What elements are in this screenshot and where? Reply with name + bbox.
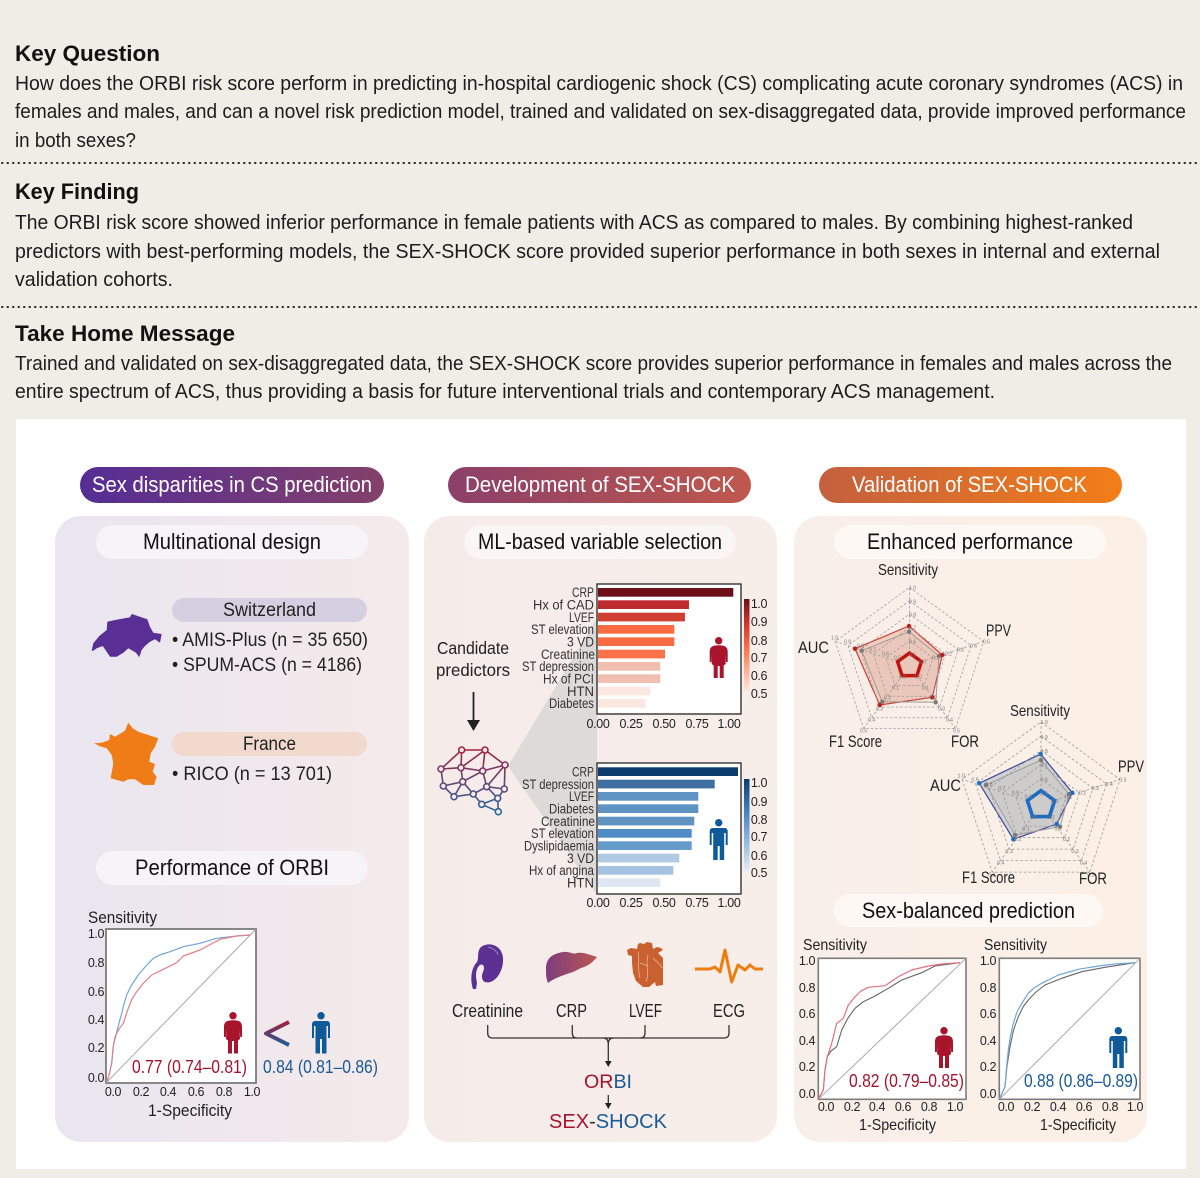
legend: male colour bar: 0.5 [751,866,768,880]
chart: male radar: 0.4 [1105,782,1113,788]
chart: male radar: 0.5 [1040,791,1048,797]
chart: female predictor ranking bars: CRP [572,585,594,600]
text block: key question: in both sexes? [15,129,136,152]
chart: male predictor ranking bars: Diabetes [549,802,594,816]
labels: male radar axes: FOR [1079,869,1107,888]
subheading pill: sex-balanced prediction [834,894,1103,927]
chart: female SEX-SHOCK ROC: 0.4 [799,1034,816,1048]
chart: male radar: 1.0 [1040,720,1048,726]
label: LVEF: LVEF [629,1001,662,1021]
chart: ORBI ROC curves [88,908,261,1120]
heading: key finding: Key Finding [15,179,139,204]
chart: male radar: 0.5 [988,872,996,878]
chart: male radar: 0.0 [1030,815,1037,821]
chart: female radar: 0.1 [922,686,929,692]
chart: ORBI ROC curves: 0.2 [88,1041,105,1055]
labels: male radar axes: F1 Score [962,868,1015,887]
text block: Swiss cohorts: • SPUM-ACS (n = 4186) [172,655,362,676]
label: CRP: CRP [556,1001,587,1021]
icon: male figure [1109,1027,1127,1068]
text block: French cohort: • RICO (n = 13 701) [172,764,332,785]
chart: female radar: 0.5 [894,656,901,662]
text block: key finding: validation cohorts. [15,268,173,291]
text block: take home message: entire spectrum of ACS, thus providing a basis for future interventional trials and contemporary ACS management. [15,380,995,403]
legend: female colour bar: 0.7 [751,651,768,665]
chart: female predictor ranking bars: 0.25 [620,717,643,731]
heading pill: sex disparities: Sex disparities in CS prediction [92,472,372,497]
chart: female SEX-SHOCK ROC: 0.4 [869,1100,886,1114]
chart: female radar: 0.5 [909,652,916,658]
chart: ORBI ROC curves: 0.0 [88,1071,105,1085]
chart: male SEX-SHOCK ROC: 0.0 [998,1100,1015,1114]
text block: Swiss cohorts: • AMIS-Plus (n = 35 650) [172,630,368,651]
heading: take home message: Take Home Message [15,321,235,346]
labels: female radar axes: AUC [798,638,829,657]
subheading pill: ML-based variable selection [464,525,736,559]
chart: male predictor ranking bars: Creatinine [541,814,595,829]
chart: male predictor ranking bars [522,763,741,910]
chart: female radar: 0.5 [983,640,990,646]
chart: male radar [958,720,1127,878]
labels: female radar axes: FOR [951,732,979,751]
legend: male colour bar: 0.7 [751,830,768,844]
chart: female radar: 0.7 [909,626,916,632]
legend: female colour bar: 0.5 [751,687,768,701]
chart: male predictor ranking bars: 0.50 [653,896,676,910]
chart: female predictor ranking bars: ST elevation [531,622,594,637]
label: candidate predictors: Candidate [437,638,509,658]
chart: female SEX-SHOCK ROC: 0.6 [799,1007,816,1021]
subheading pill: enhanced performance [834,525,1106,559]
legend: female colour bar: 0.8 [751,634,768,648]
labels: male radar axes [930,703,1144,888]
chart: male radar: 0.2 [1063,837,1070,843]
chart: female radar: 0.1 [932,656,939,662]
chart: male radar: 0.3 [1005,849,1013,855]
subheading pill: performance of ORBI: Performance of ORBI [135,855,329,880]
chart: female radar: 0.4 [946,718,953,724]
chart: male predictor ranking bars: Hx of angina [529,863,594,878]
label pill: Switzerland [172,598,367,622]
label: ORBI: ORBI [584,1071,632,1093]
chart: ORBI ROC curves: 0.2 [133,1085,150,1099]
chart: male SEX-SHOCK ROC: 0.4 [980,1034,997,1048]
chart: female SEX-SHOCK ROC: 0.6 [895,1100,912,1114]
chart: female radar: 0.8 [857,644,864,650]
text block: key finding: The ORBI risk score showed inferior performance in female patients with ACS as compared to males. By combining highest-ranked [15,211,1133,234]
labels: female radar axes: Sensitivity [878,562,938,579]
label: creatinine: Creatinine [452,1001,523,1021]
icon: male figure [710,819,728,860]
legend: male colour bar: 1.0 [751,776,768,790]
label pill: France: France [243,734,296,755]
chart: male radar: 1.0 [958,773,965,779]
chart: female predictor ranking bars: 1.00 [718,717,741,731]
icon: liver [546,952,597,983]
heading: key question: Key Question [15,41,160,66]
chart: female predictor ranking bars: Hx of PCI [543,672,594,686]
icon: female figure [935,1027,953,1068]
chart: male radar: 0.4 [1080,861,1087,867]
panel: development of SEX-SHOCK [424,467,777,1142]
chart: female predictor ranking bars: Hx of CAD [533,598,594,612]
chart: female radar: 0.7 [869,648,876,654]
chart: ORBI ROC curves: 0.4 [88,1013,105,1027]
labels: male radar axes: PPV [1118,757,1144,776]
bracket and arrow to ORBI [488,1025,729,1067]
chart: female predictor ranking bars: ST depression [522,659,594,674]
chart: male SEX-SHOCK ROC: 0.6 [1076,1100,1093,1114]
chart: ORBI ROC curves: 1.0 [88,927,105,941]
chart: male SEX-SHOCK ROC: 0.6 [980,1007,997,1021]
funnel connecting network to bar charts [508,618,597,895]
chart: male SEX-SHOCK ROC: 0.2 [1024,1100,1041,1114]
icon: ECG trace [695,950,763,982]
chart: female radar: 0.1 [892,686,899,692]
chart: ORBI ROC curves: 1.0 [244,1085,261,1099]
chart: ORBI ROC curves: 0.6 [88,985,105,999]
chart: male predictor ranking bars: CRP [572,764,594,780]
icon: heart [627,942,663,987]
chart: female radar: 0.0 [919,660,926,666]
chart: female radar [831,586,990,734]
legend: male colour bar [744,776,768,880]
chart: female predictor ranking bars: 0.00 [587,717,610,731]
chart: female SEX-SHOCK ROC: 1.0 [799,954,816,968]
text block: key question [15,72,1186,152]
icon: kidney [471,944,503,989]
chart: male predictor ranking bars: 1.00 [718,896,741,910]
value: male AUC: 0.84 (0.81–0.86) [263,1057,378,1077]
icon: neural network [438,747,508,815]
legend: female colour bar: 0.9 [751,615,768,629]
chart: male predictor ranking bars: ST depression [522,777,594,792]
chart: male radar: 0.3 [1092,786,1099,792]
icon: less-than sign [266,1022,289,1045]
chart: male radar: 0.3 [1071,849,1079,855]
labels: female radar axes [798,562,1011,751]
subheading pill: ML-based variable selection: ML-based variable selection [478,529,722,554]
chart: female radar: 0.0 [899,674,906,680]
text block: take home message [15,352,1172,403]
legend: male colour bar: 0.6 [751,849,768,863]
heading pill: validation: Validation of SEX-SHOCK [852,472,1087,497]
chart: male SEX-SHOCK ROC: 0.2 [980,1060,997,1074]
legend: male colour bar: 0.9 [751,795,768,809]
panel: validation of SEX-SHOCK [794,467,1147,1142]
chart: female predictor ranking bars: Diabetes [549,696,594,711]
chart: female predictor ranking bars: 3 VD [567,634,594,650]
label: ECG: ECG [713,1001,745,1021]
icon: France map [94,723,158,785]
chart: female SEX-SHOCK ROC: 1.0 [947,1100,964,1114]
chart: female radar: 0.3 [876,706,883,712]
labels: female radar axes: PPV [986,621,1011,640]
chart: male radar: 0.8 [1040,749,1048,755]
chart: ORBI ROC curves: 0.0 [105,1085,122,1099]
chart: male radar: 0.1 [1065,795,1072,801]
text block: Swiss cohorts [172,630,368,676]
chart: female SEX-SHOCK ROC: 0.82 (0.79–0.85) [849,1071,964,1091]
labels: male radar axes: Sensitivity [1010,703,1070,720]
chart: male predictor ranking bars: Dyslipidaemia [524,838,594,854]
chart: female radar: 0.6 [909,640,916,646]
chart: ORBI ROC curves: 0.77 (0.74–0.81) [132,1057,247,1077]
chart: female radar: 0.3 [957,648,964,654]
chart: male radar: 0.5 [1119,778,1127,784]
icon: Switzerland map [92,614,162,657]
chart: male SEX-SHOCK ROC: 0.0 [980,1087,997,1101]
chart: male predictor ranking bars: 0.75 [686,896,709,910]
chart: male predictor ranking bars: ST elevation [531,826,594,841]
chart: male radar: 0.7 [998,786,1005,792]
chart: female predictor ranking bars: 0.75 [686,717,709,731]
labels: female radar axes: F1 Score [829,732,882,751]
figure background panel [16,419,1186,1169]
chart: female SEX-SHOCK ROC: 0.2 [844,1100,861,1114]
chart: female radar: 0.2 [930,696,937,702]
chart: male SEX-SHOCK ROC: 0.4 [1050,1100,1067,1114]
chart: female SEX-SHOCK ROC: Sensitivity [803,937,867,954]
chart: male radar: 0.2 [1079,790,1086,796]
label: candidate predictors [436,638,510,680]
chart: female radar: 0.0 [915,674,922,680]
chart: female SEX-SHOCK ROC: 0.8 [799,981,816,995]
chart: male radar: 0.5 [1087,872,1095,878]
chart: female radar: 0.3 [938,706,945,712]
subheading pill: enhanced performance: Enhanced performance [867,529,1073,554]
chart: female radar: 0.4 [970,644,977,650]
chart: female predictor ranking bars: LVEF [569,610,594,625]
chart: female radar: 0.5 [953,728,960,734]
chart: male radar: 0.0 [1047,815,1054,821]
chart: female SEX-SHOCK ROC: 0.0 [818,1100,835,1114]
subheading pill: performance of ORBI [96,851,368,885]
label: SEX-SHOCK: SEX-SHOCK [549,1111,668,1133]
chart: male radar: 0.8 [985,782,993,788]
chart: female radar: 0.9 [909,600,916,606]
chart: female SEX-SHOCK ROC: 0.0 [799,1087,816,1101]
chart: male radar: 0.5 [1025,795,1032,801]
chart: male radar: 0.4 [997,861,1004,867]
chart: male predictor ranking bars: 0.25 [620,896,643,910]
chart: male radar: 0.1 [1054,827,1062,833]
chart: ORBI ROC curves: Sensitivity [88,908,157,927]
legend: female colour bar: 0.6 [751,669,768,683]
chart: female radar: 1.0 [909,586,916,592]
chart: ORBI ROC curves: 0.8 [88,956,105,970]
icon: female figure [710,637,728,678]
label pill: France [172,732,367,756]
chart: ORBI ROC curves: 0.4 [160,1085,177,1099]
label pill: Switzerland: Switzerland [223,600,316,621]
chart: female radar: 0.2 [945,652,952,658]
arrow: candidate predictors to network [467,692,480,731]
chart: male SEX-SHOCK ROC: 0.88 (0.86–0.89) [1024,1071,1138,1091]
chart: female radar: 0.5 [860,728,867,734]
chart: male SEX-SHOCK ROC: Sensitivity [984,937,1047,954]
chart: female radar: 0.9 [844,640,851,646]
legend: female colour bar: 1.0 [751,597,768,611]
chart: female SEX-SHOCK ROC [799,937,966,1134]
chart: male predictor ranking bars: 0.00 [587,896,610,910]
chart: male SEX-SHOCK ROC: 0.8 [980,981,997,995]
chart: male radar: 0.9 [1040,735,1048,741]
chart: female SEX-SHOCK ROC: 0.8 [921,1100,938,1114]
chart: male SEX-SHOCK ROC [980,937,1144,1134]
chart: female predictor ranking bars: Creatinine [541,647,595,662]
chart: male radar: 0.7 [1040,763,1048,769]
text block: key finding: predictors with best-performing models, the SEX-SHOCK score provided superior performance in both sexes in internal and external [15,240,1160,263]
arrow: ORBI to SEX-SHOCK [605,1095,612,1109]
panel: sex disparities in CS prediction [55,467,409,1142]
chart: female radar: 1.0 [831,636,838,642]
legend: male colour bar: 0.8 [751,813,768,827]
chart: male SEX-SHOCK ROC: 1.0 [980,954,997,968]
subheading pill: multinational design: Multinational design [143,529,321,554]
chart: male radar: 0.2 [1014,837,1021,843]
chart: male radar: 0.6 [1012,790,1019,796]
chart: male SEX-SHOCK ROC: 1.0 [1127,1100,1144,1114]
heading pill: development [448,467,751,503]
chart: male radar: 0.9 [971,778,979,784]
chart: male predictor ranking bars: 3 VD [567,851,594,866]
chart: ORBI ROC curves: 0.8 [216,1085,233,1099]
chart: male radar: 0.6 [1040,778,1048,784]
chart: male SEX-SHOCK ROC: 1-Specificity [1040,1117,1116,1134]
chart: female predictor ranking bars [522,584,741,731]
labels: male radar axes: AUC [930,776,961,795]
chart: female SEX-SHOCK ROC: 0.2 [799,1060,816,1074]
chart: male radar: 0.1 [1022,827,1030,833]
chart: female radar: 0.6 [882,652,889,658]
chart: male SEX-SHOCK ROC: 0.8 [1102,1100,1119,1114]
chart: female radar: 0.2 [884,696,891,702]
chart: female radar: 0.8 [909,612,916,618]
legend: female colour bar [744,597,768,701]
icon: male figure [312,1012,330,1054]
heading pill: sex disparities [80,467,384,503]
heading pill: validation [819,467,1122,503]
chart: ORBI ROC curves: 0.6 [188,1085,205,1099]
chart: male radar: 0.0 [1051,799,1059,805]
subheading pill: sex-balanced prediction: Sex-balanced prediction [862,898,1075,923]
chart: female SEX-SHOCK ROC: 1-Specificity [859,1117,936,1134]
chart: female predictor ranking bars: HTN [567,684,594,699]
chart: male predictor ranking bars: LVEF [569,789,594,804]
label: candidate predictors: predictors [436,660,510,680]
chart: female radar: 0.4 [868,718,875,724]
icon: female figure [224,1012,242,1054]
heading pill: development: Development of SEX-SHOCK [465,472,735,497]
subheading pill: multinational design [96,525,368,559]
chart: female predictor ranking bars: 0.50 [653,717,676,731]
chart: male predictor ranking bars: HTN [567,876,594,890]
text block: key finding [15,211,1160,291]
chart: ORBI ROC curves: 1-Specificity [148,1101,232,1120]
